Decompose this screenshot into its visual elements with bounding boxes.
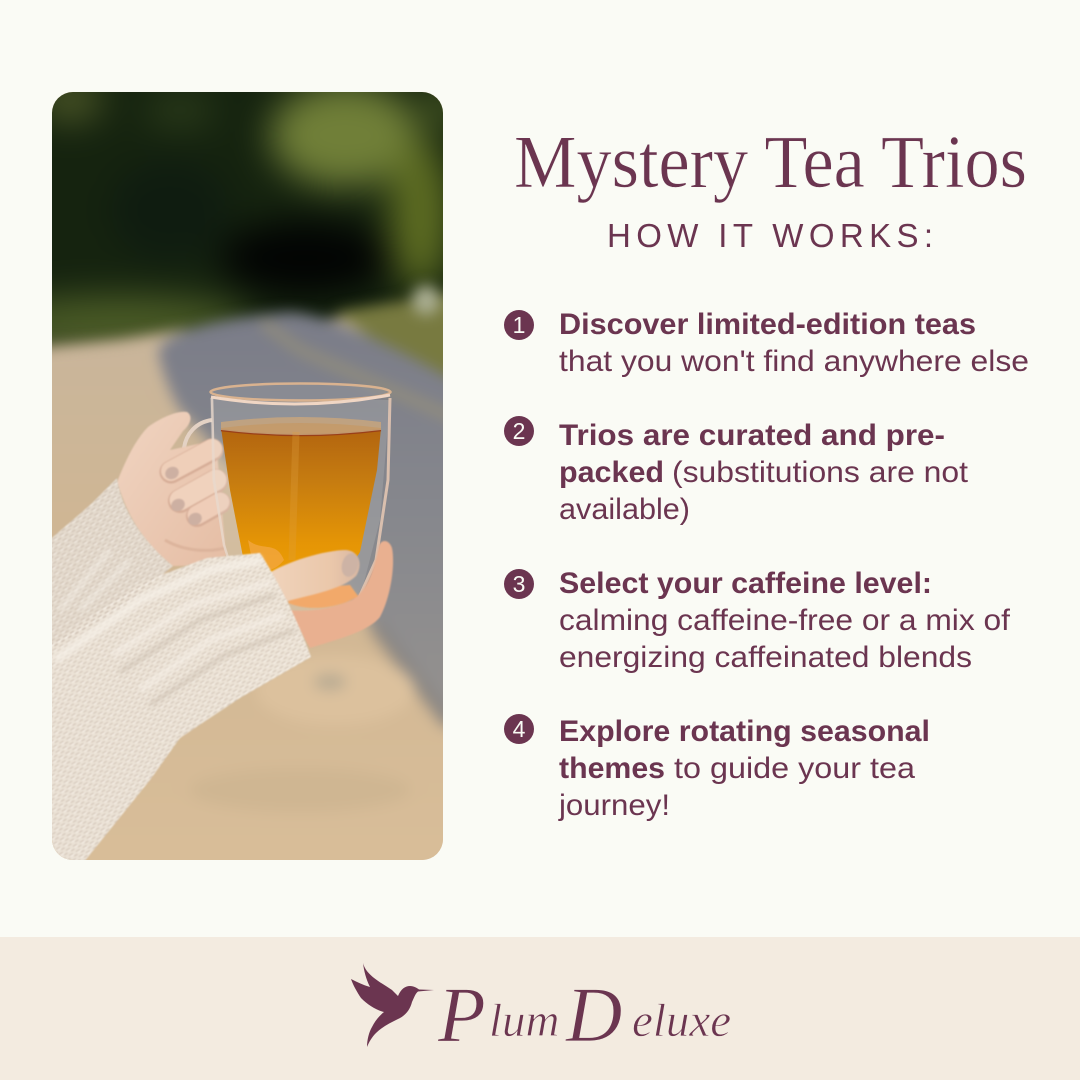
step 3 text: [559, 567, 1011, 674]
number badge 2: 2: [513, 418, 525, 444]
number badge 4: [504, 714, 534, 744]
subtitle: HOW IT WORKS:: [607, 217, 933, 254]
number badge 1: 1: [513, 312, 525, 338]
step 4 text: journey!: [558, 789, 670, 822]
number badge 2: [504, 416, 534, 446]
step 4 text: Explore rotating seasonal: [559, 715, 930, 748]
title: Mystery Tea Trios: [514, 121, 1027, 204]
footer band: [0, 937, 1080, 1080]
number badge 4: 4: [513, 716, 526, 742]
step 2 text: [559, 419, 969, 526]
mug handle: [184, 420, 212, 448]
step 3: [504, 567, 1011, 674]
icon: hummingbird: [351, 963, 434, 1047]
step 4 text: to guide your tea: [674, 752, 915, 785]
sweater ribs: [55, 550, 295, 705]
tea: [221, 423, 381, 572]
step 2 text: Trios are curated and pre-: [559, 419, 945, 452]
step 3 text: energizing caffeinated blends: [559, 641, 972, 674]
step 1 text: that you won't find anywhere else: [559, 345, 1029, 378]
step 2: [504, 416, 969, 526]
wordmark: D: [565, 971, 622, 1058]
step 3 text: calming caffeine-free or a mix of: [559, 604, 1011, 637]
number badge 3: [504, 569, 534, 599]
glass mug: [210, 384, 390, 612]
step 2 text: packed: [559, 456, 664, 489]
step 4: [504, 714, 930, 822]
step 2 text: available): [559, 493, 690, 526]
photo: hands holding a glass mug of tea: [52, 92, 443, 860]
back hand: [117, 412, 226, 566]
step 4 text: themes: [559, 752, 665, 785]
wordmark: P: [437, 971, 486, 1058]
step 2 text: (substitutions are not: [672, 456, 969, 489]
logo: [351, 963, 731, 1058]
step 4 text: [558, 715, 930, 822]
number badge 3: 3: [513, 571, 525, 597]
front hand with thumb: [266, 541, 393, 648]
fingers: [171, 450, 212, 472]
step 1 text: Discover limited-edition teas: [559, 308, 976, 341]
wordmark: eluxe: [632, 995, 731, 1047]
step 3 text: Select your caffeine level:: [559, 567, 932, 600]
step 1: [504, 308, 1029, 378]
number badge 1: [504, 310, 534, 340]
photo background: blurred forest and road: [52, 92, 443, 860]
step 1 text: [559, 308, 1029, 378]
sweater sleeves: [40, 478, 311, 862]
wordmark: lum: [489, 995, 560, 1047]
rim: [210, 384, 390, 400]
